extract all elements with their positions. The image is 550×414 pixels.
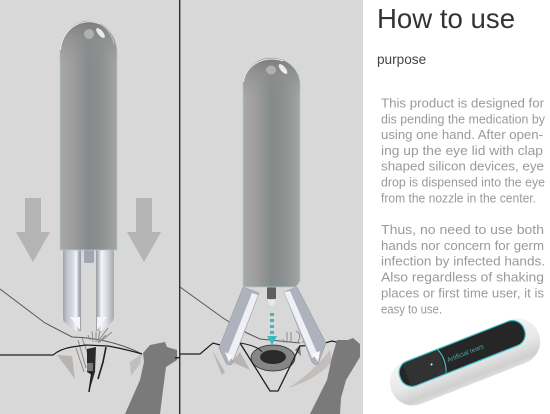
right clip arm [284, 287, 326, 365]
product photo: capsule dispenser [383, 312, 547, 412]
title: How to use [377, 3, 515, 34]
right prong [96, 250, 114, 331]
text block: benefits: easy to use. [381, 301, 442, 316]
text block: benefits: infection by infected hands. [381, 254, 545, 269]
text block: description: using one hand. After open- [381, 127, 543, 142]
divider [436, 348, 449, 374]
body [243, 58, 300, 287]
text block: description: This product is designed for [381, 96, 545, 111]
text block: benefits: hands nor concern for germ [381, 238, 544, 253]
case [383, 312, 547, 412]
text block: description: dis pending the medication by [381, 111, 546, 126]
text block: benefits: Also regardless of shaking [381, 270, 544, 285]
icon: left down arrow [16, 198, 50, 262]
eye dropper device left [60, 21, 117, 331]
product label: Artificial tears [446, 343, 486, 364]
text block: description: drop is dispensed into the eye [381, 175, 545, 190]
icon: hand shadow right [310, 338, 360, 414]
nozzle and drop [267, 287, 276, 299]
text block: description: shaped silicon devices, eye [381, 159, 544, 174]
icon: right down arrow [127, 198, 161, 262]
text block: benefits: Thus, no need to use both [381, 222, 544, 237]
text block: description: ing up the eye lid with clap [381, 143, 543, 158]
left prong [63, 250, 81, 331]
eye front view open [180, 287, 340, 391]
eye dropper device right [219, 58, 326, 365]
screen [396, 317, 529, 390]
text block: benefits: places or first time user, it is [381, 286, 544, 301]
body [60, 21, 117, 250]
panel: grey illustration background [0, 0, 363, 414]
subheading: purpose [377, 52, 426, 67]
panel: step 1 pressing device onto the eyelid [0, 21, 180, 414]
nozzle [84, 250, 94, 263]
icon: hand shadow left [125, 342, 177, 414]
eye side view closed [0, 289, 142, 392]
icon: dotted cyan arrow [267, 313, 277, 345]
left clip arm [219, 287, 259, 365]
text block: description: from the nozzle in the center. [381, 191, 536, 206]
panel: step 2 opening the eyelid and dispensing [180, 58, 360, 414]
iris [251, 345, 295, 371]
